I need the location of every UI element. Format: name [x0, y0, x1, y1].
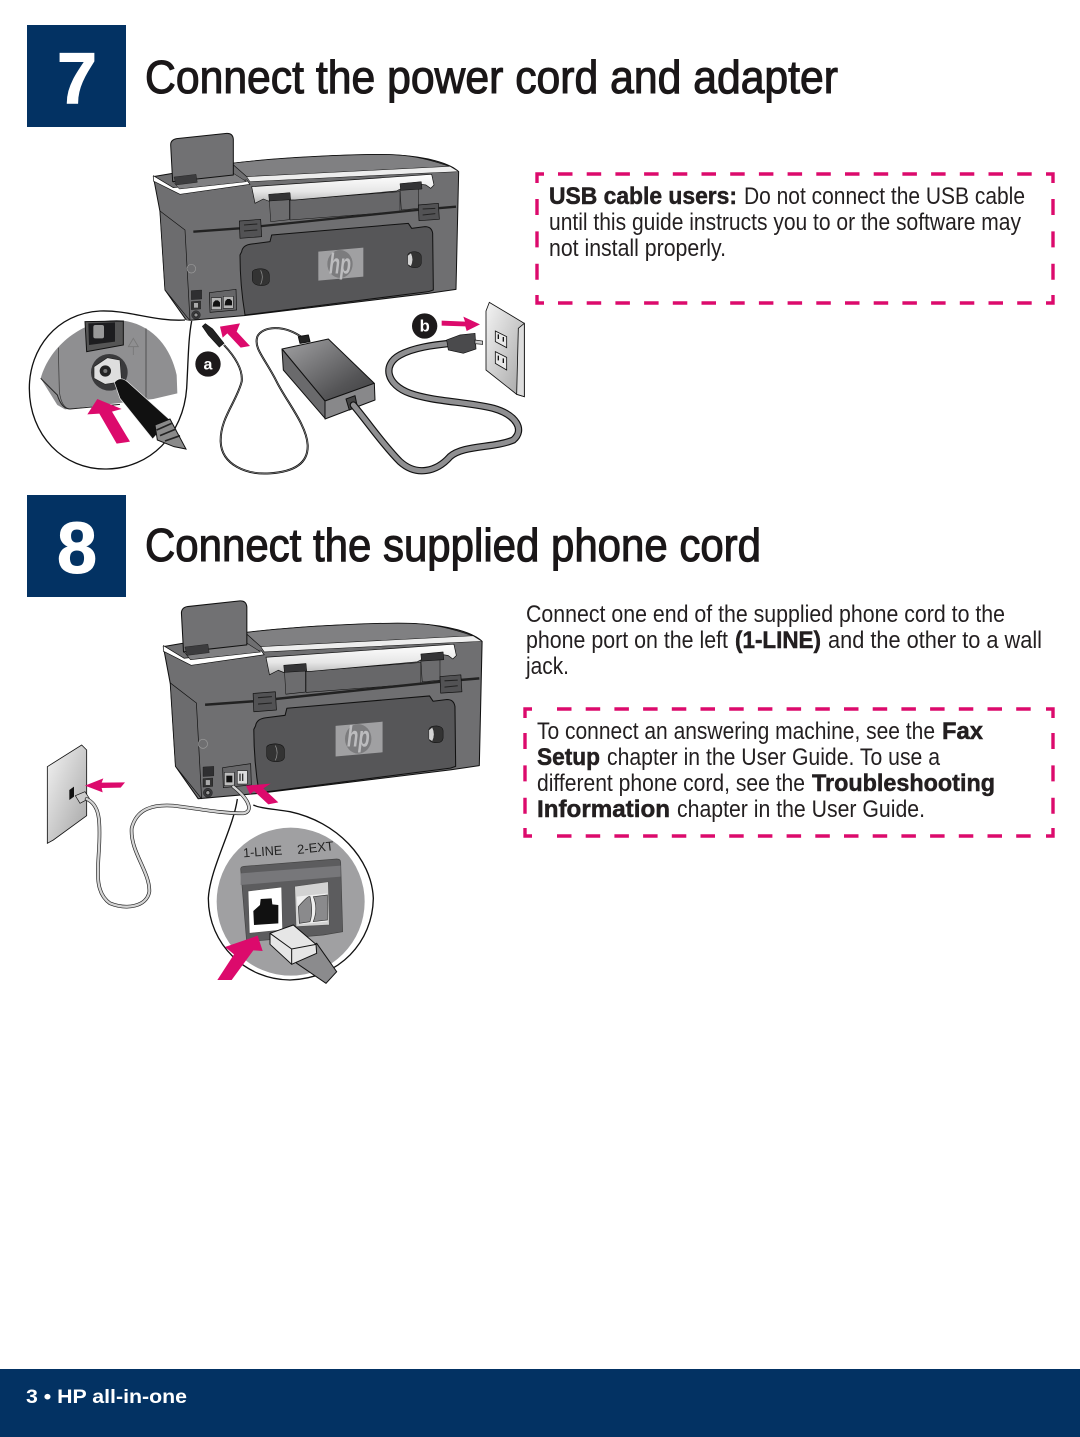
intro text: phone cord: [525, 601, 1042, 680]
footer text: 3 • HP all-in-one: [26, 1387, 187, 1408]
hp logo: hp: [347, 721, 370, 754]
callout text: To connect an answering machine, see the: [537, 718, 935, 745]
callout text: Setup: [537, 744, 600, 771]
footer bar: [0, 1369, 1080, 1437]
power adapter: [282, 335, 375, 419]
step number 7 badge: [27, 25, 126, 127]
dashed callout border: [525, 709, 1053, 836]
pink arrow at wall jack: [85, 778, 125, 792]
intro text: phone cord: Connect one end of the supplied phone cord to the: [526, 601, 1005, 628]
step number 7 badge: 7: [57, 39, 97, 119]
callout: USB cable users: [537, 174, 1053, 303]
intro text: phone cord: and the other to a wall: [828, 627, 1042, 654]
step number 8 badge: 8: [57, 509, 97, 589]
port labels: 1-LINE: [242, 843, 283, 860]
label b: [412, 313, 437, 339]
callout text: until this guide instructs you to or the software may: [549, 209, 1021, 236]
phone ports on printer: [209, 289, 237, 312]
wall outlet: [486, 302, 524, 397]
pink arrow at wall outlet: [442, 317, 480, 331]
printer rear view: [153, 133, 459, 321]
callout text: [549, 183, 1025, 262]
illustration: power cord and adapter: [29, 133, 524, 474]
callout text: chapter in the User Guide.: [677, 796, 925, 823]
port labels: 2-EXT: [296, 838, 334, 857]
printer rear view: [163, 601, 482, 799]
intro text: phone cord: jack.: [525, 653, 569, 680]
callout text: USB cable users:: [549, 183, 737, 210]
dashed callout border: [537, 174, 1053, 303]
label a: a: [204, 356, 213, 373]
intro text: phone cord: phone port on the left: [526, 627, 728, 654]
callout: answering machine: [525, 709, 1053, 836]
heading: step 7: Connect the power cord and adapter: [145, 51, 838, 103]
magnified phone port callout: [208, 799, 373, 983]
intro text: phone cord: (1-LINE): [735, 627, 821, 654]
illustration: phone cord: [47, 601, 482, 983]
pink arrow at plug: [220, 323, 250, 348]
plug and cable a: [202, 324, 308, 474]
phone ports on printer: [223, 764, 251, 788]
hp logo: hp: [329, 248, 351, 280]
callout text: different phone cord, see the: [537, 770, 805, 797]
callout text: [537, 718, 995, 823]
pink arrow at printer port: [246, 784, 278, 804]
label a: [195, 351, 221, 377]
callout text: Troubleshooting: [812, 770, 995, 797]
callout text: chapter in the User Guide. To use a: [607, 744, 941, 771]
phone cord: [87, 787, 249, 907]
step number 8 badge: [27, 495, 126, 597]
wall phone jack: [47, 745, 89, 843]
label b: b: [420, 317, 430, 336]
port labels: [242, 838, 334, 860]
callout text: Do not connect the USB cable: [744, 183, 1025, 210]
magnified power port callout: [29, 311, 192, 469]
heading: step 8: Connect the supplied phone cord: [145, 519, 761, 571]
callout text: Fax: [942, 718, 984, 745]
power cable to wall: [353, 343, 519, 471]
callout text: Information: [537, 796, 670, 823]
power plug: [447, 333, 483, 353]
callout text: not install properly.: [549, 235, 726, 262]
